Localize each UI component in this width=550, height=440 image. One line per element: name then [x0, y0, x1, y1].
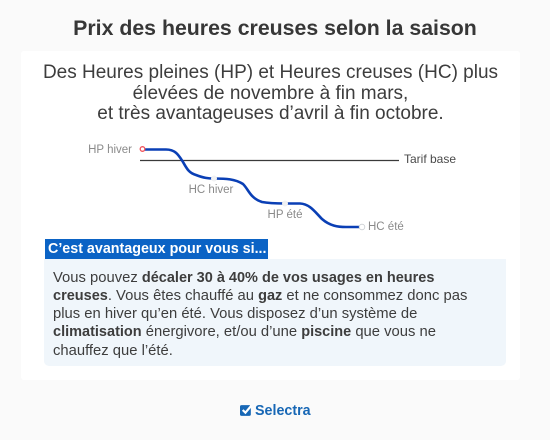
line chart [88, 144, 456, 233]
callout body: Vous pouvez décaler 30 à 40% de vos usages en heures [53, 270, 434, 286]
intro text [43, 62, 498, 124]
callout body: plus en hiver qu’en été. Vous disposez d’un système de [53, 306, 417, 322]
title: Prix des heures creuses selon la saison [73, 16, 477, 40]
callout body: chauffez que l’été. [53, 342, 173, 358]
callout body: creuses. Vous êtes chauffé au gaz et ne consommez donc pas [53, 288, 467, 304]
point: HP hiver: HP hiver [88, 144, 132, 156]
point: HC été: HC été [368, 221, 404, 233]
intro text: élevées de novembre à fin mars, [133, 82, 408, 104]
point: HP été [268, 200, 302, 221]
wordmark: Selectra [255, 403, 311, 419]
callout body [44, 259, 506, 366]
point: HP été: HP été [268, 209, 302, 221]
panel: main card [21, 51, 520, 380]
point: HC hiver [189, 176, 234, 196]
logo: Selectra [240, 403, 311, 419]
callout heading: C’est avantageux pour vous si... [48, 241, 266, 257]
callout body: climatisation énergivore, et/ou d’une piscine que vous ne [53, 324, 436, 340]
icon: check box [240, 405, 251, 416]
base tariff line: Tarif base [404, 152, 456, 166]
intro text: Des Heures pleines (HP) et Heures creuses (HC) plus [43, 62, 498, 83]
intro text: et très avantageuses d’avril à fin octobre. [97, 103, 444, 124]
price curve [143, 150, 361, 227]
point: HC hiver: HC hiver [189, 184, 234, 196]
